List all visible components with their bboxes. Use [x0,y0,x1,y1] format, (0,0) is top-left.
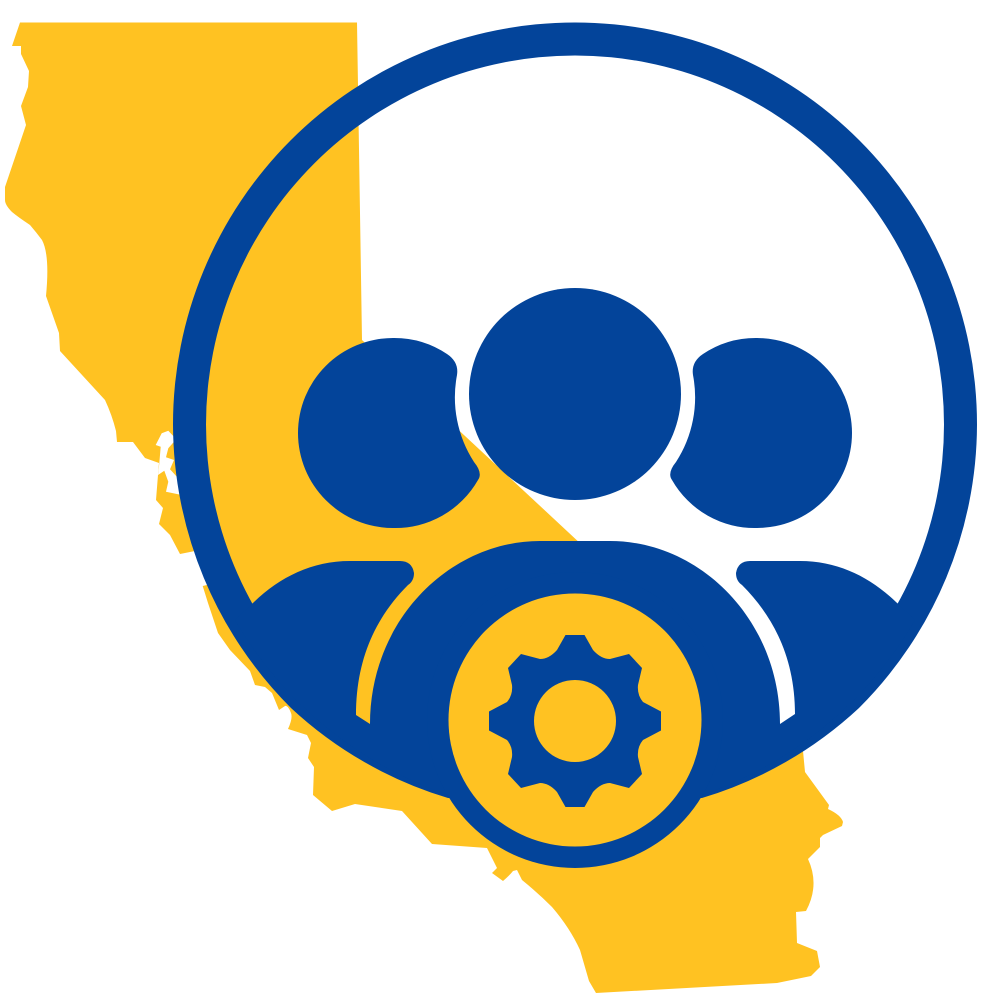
icon: center person head [469,288,681,500]
icon: gear [489,635,661,807]
icon: right person head [670,338,852,528]
icon: left person head [298,338,480,528]
badge: gear circle [427,572,723,868]
icon: three person bodies [235,541,915,816]
ring: large blue circle outline [173,22,977,798]
